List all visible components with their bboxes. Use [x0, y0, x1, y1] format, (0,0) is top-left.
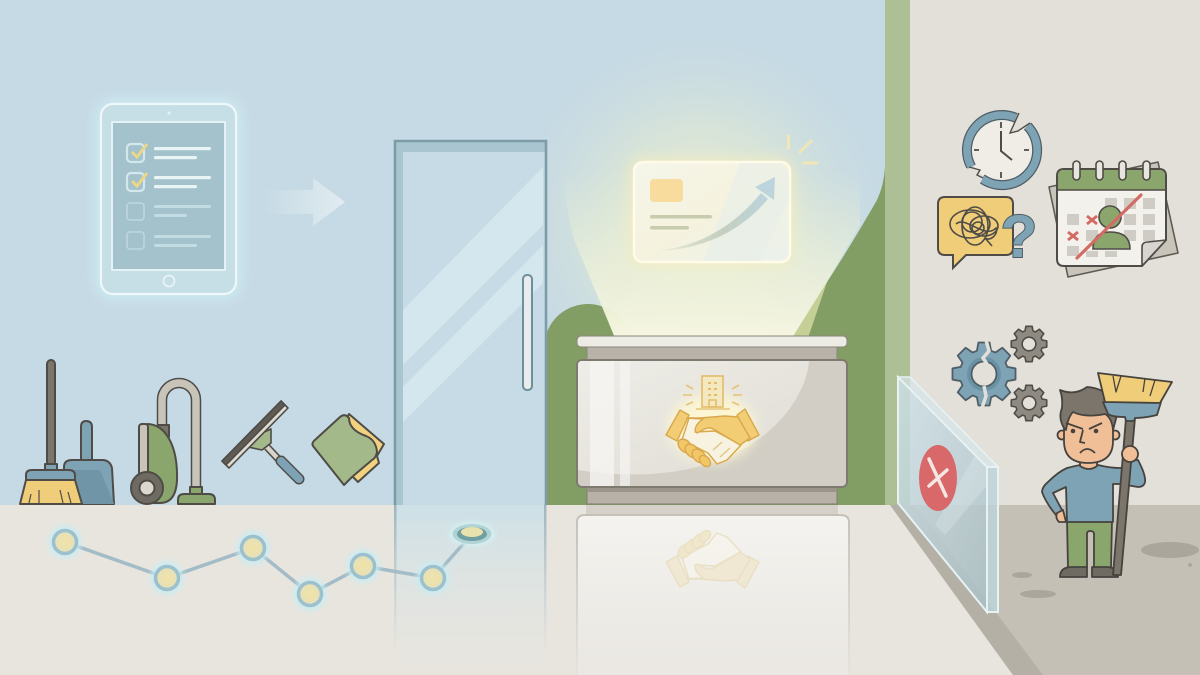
icon: confused speech bubble — [938, 197, 1037, 270]
background: light floor — [0, 505, 1013, 675]
scribble in bubble — [950, 207, 998, 246]
calendar day grid — [1067, 198, 1155, 257]
door reflection on floor — [394, 505, 546, 670]
cleaning tools — [20, 360, 384, 504]
shoes — [1060, 567, 1118, 577]
clasped hands — [666, 409, 759, 469]
background: green wall strip — [885, 0, 910, 510]
clock cracks — [1010, 110, 1032, 133]
desk body — [577, 360, 847, 487]
progress path on floor — [49, 522, 495, 610]
calendar rings — [1073, 161, 1150, 180]
light halo behind card — [510, 35, 890, 415]
background: green hillside behind desk — [545, 167, 885, 510]
light beam — [560, 170, 860, 338]
reflected handshake — [666, 528, 759, 588]
angry face — [1066, 423, 1102, 453]
desk top slab — [577, 336, 847, 347]
icon: cancelled calendar — [1049, 161, 1178, 277]
calendar x marks — [1068, 216, 1097, 240]
icon: broken blue gear — [952, 340, 1016, 408]
checklist row 3 — [127, 203, 211, 220]
folded corner — [1142, 240, 1166, 266]
background: beige wall on right — [910, 0, 1200, 510]
red x sign — [919, 445, 957, 511]
building icon — [683, 376, 742, 409]
growth arrow — [655, 177, 775, 251]
checklist row 1 — [127, 144, 211, 162]
reception desk — [577, 336, 849, 675]
background: floor edge stripe — [890, 505, 1043, 675]
vacuum cleaner — [131, 383, 215, 504]
head — [1058, 387, 1120, 469]
checklist row 4 — [127, 232, 211, 249]
broom — [20, 360, 82, 504]
checklist row 2 — [127, 173, 211, 191]
dustpan — [64, 421, 114, 504]
glowing card with growth arrow — [629, 136, 817, 266]
broom head — [1098, 373, 1172, 421]
hand on broom — [1122, 446, 1138, 462]
clock ring pieces — [967, 115, 1037, 185]
light beam sliver right — [790, 282, 827, 338]
clock ticks and hands — [974, 122, 1029, 178]
shirt and arms — [1042, 460, 1145, 522]
hair — [1060, 387, 1117, 430]
end marker disc — [449, 522, 495, 546]
light beam sliver left — [603, 307, 632, 338]
glass barrier with red x — [898, 377, 998, 612]
icon: broken clock — [962, 110, 1037, 185]
gear crack — [982, 340, 989, 408]
trousers — [1067, 520, 1112, 568]
door handle — [523, 275, 532, 390]
squeegee — [222, 401, 299, 479]
hand on hip — [1056, 510, 1066, 522]
desk reflection on floor — [577, 505, 849, 675]
background: grey floor on right — [890, 505, 1200, 675]
tablet checklist — [101, 104, 236, 294]
handshake and building emblem — [666, 376, 759, 469]
question mark: ? — [1001, 203, 1037, 270]
dirt stains on floor — [1012, 542, 1199, 598]
background: blue wall — [0, 0, 890, 510]
glass door — [394, 141, 546, 670]
arrow: tablet to door — [263, 178, 345, 226]
progress nodes — [49, 526, 449, 610]
cleaning cloth — [312, 414, 384, 485]
person silhouette — [1093, 206, 1130, 249]
sparkle rays — [788, 136, 817, 163]
icon: small gear bottom — [1011, 385, 1047, 421]
red strike line — [1077, 195, 1141, 258]
icon: small gear top — [1011, 326, 1047, 362]
frustrated man holding broom — [1042, 373, 1172, 577]
broom handle — [1113, 418, 1135, 575]
